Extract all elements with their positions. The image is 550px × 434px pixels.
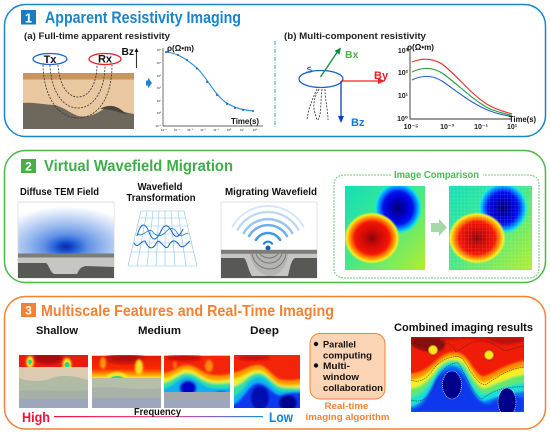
chart: multi-component resistivity curves: 10⁻¹ [474, 124, 489, 131]
diagram: multi-component loop and field arrows: Bx [345, 49, 359, 61]
arrow: to chart [146, 78, 152, 88]
diagram: multi-component loop and field arrows [299, 48, 389, 129]
diagram: Tx Rx ground section: Bz [122, 46, 134, 58]
chart: apparent resistivity curve: 10¹ [240, 128, 244, 132]
imaging panel: shallow [19, 352, 88, 408]
label: Wavefield Transformation [126, 182, 196, 204]
chart: apparent resistivity curve: 10⁻⁴ [174, 128, 181, 132]
chart: apparent resistivity curve: 10¹ [157, 99, 161, 103]
chart: multi-component resistivity curves: Time(s) [509, 114, 536, 124]
image: diffuse TEM field [18, 202, 114, 278]
chart: apparent resistivity curve: 10⁻¹ [213, 128, 219, 132]
heading: Multiscale Features and Real-Time Imaging: Multiscale Features and Real-Time Imaging [41, 303, 334, 320]
section number badge 2 [21, 159, 36, 174]
subheading (b): (b) Multi-component resistivity [284, 31, 427, 42]
chart: multi-component resistivity curves: 10² [398, 70, 409, 77]
imaging panel: medium [92, 353, 161, 408]
panel: virtual wavefield migration [4, 150, 546, 282]
chart: apparent resistivity curve: 10² [157, 86, 161, 90]
chart: multi-component resistivity curves: 10¹ [398, 93, 409, 100]
label: Shallow: Shallow [36, 325, 78, 337]
image: migrating wavefield [221, 202, 317, 278]
chart: apparent resistivity curve: 10⁰ [227, 128, 232, 132]
chart: apparent resistivity curve: 10⁻⁵ [161, 128, 168, 132]
chart: multi-component resistivity curves: 10⁰ [397, 115, 408, 123]
label: Wavefield Transformation: Transformation [126, 193, 196, 204]
chart: apparent resistivity curve: 10⁴ [156, 61, 162, 65]
label: real-time imaging algorithm: Real-time [324, 401, 368, 412]
chart: multi-component resistivity curves: 10⁻⁵ [404, 124, 418, 131]
label: real-time imaging algorithm [306, 401, 390, 423]
chart: multi-component resistivity curves [397, 42, 536, 131]
chart: apparent resistivity curve: Time(s) [231, 116, 259, 126]
label: Migrating Wavefield: Migrating Wavefield [225, 187, 317, 198]
heatmap: combined imaging results [411, 337, 524, 412]
chart: multi-component resistivity curves: ρ(Ω•m) [407, 42, 434, 52]
heatmap: before [344, 182, 425, 270]
diagram: Tx Rx ground section [23, 46, 138, 129]
diagram: Tx Rx ground section: Tx [44, 54, 57, 66]
diagram: wavefield transformation grid [128, 211, 197, 266]
chart: apparent resistivity curve: 10⁻¹ [155, 124, 161, 128]
chart: apparent resistivity curve: 10³ [157, 74, 161, 78]
frequency scale: High to Low: High [22, 410, 50, 425]
diagram: multi-component loop and field arrows: Bz [351, 117, 365, 129]
label: Wavefield Transformation: Wavefield [138, 182, 182, 193]
chart: multi-component resistivity curves: 10¹ [507, 124, 518, 131]
diagram: Tx Rx ground section: Rx [98, 54, 113, 66]
arrow: green comparison [431, 219, 447, 236]
heatmap: after [448, 182, 532, 270]
diagram: multi-component loop and field arrows: By [374, 70, 389, 82]
heading: Apparent Resistivity Imaging: Apparent Resistivity Imaging [45, 9, 241, 27]
callout: parallel computing and multi-window collaboration [310, 334, 385, 399]
imaging panel: low-medium [164, 355, 230, 408]
heading: Virtual Wavefield Migration: Virtual Wavefield Migration [44, 158, 233, 175]
panel: apparent resistivity imaging [4, 4, 546, 136]
section number badge 1 [21, 10, 36, 26]
frequency scale: High to Low: Low [269, 410, 293, 425]
chart: multi-component resistivity curves: 10³ [398, 48, 409, 55]
subheading (a): (a) Full-time apparent resistivity [24, 31, 171, 42]
label: real-time imaging algorithm: imaging algorithm [306, 412, 390, 423]
imaging panel: deep [234, 355, 300, 408]
chart: apparent resistivity curve: 10² [253, 128, 257, 132]
chart: multi-component resistivity curves: 10⁻³ [440, 124, 455, 131]
chart: apparent resistivity curve: 10⁰ [157, 111, 162, 115]
chart: apparent resistivity curve: ρ(Ω•m) [167, 43, 194, 53]
section number badge 3 [21, 303, 36, 318]
chart: apparent resistivity curve: 10⁻³ [187, 128, 193, 132]
callout: parallel computing and multi-window collaboration: Multi- [323, 361, 350, 372]
section number badge 2: 2 [25, 160, 32, 174]
section number badge 3: 3 [25, 304, 32, 318]
callout: parallel computing and multi-window collaboration: collaboration [323, 383, 383, 394]
frequency scale: High to Low [22, 407, 293, 425]
chart: apparent resistivity curve: 10⁵ [157, 48, 162, 52]
label: Medium: Medium [138, 325, 181, 337]
panel: multiscale features and real-time imaging [4, 296, 546, 429]
label: Image Comparison: Image Comparison [394, 170, 479, 181]
chart: apparent resistivity curve [155, 43, 263, 132]
frequency scale: High to Low: Frequency [134, 407, 181, 418]
callout: parallel computing and multi-window collaboration: computing [323, 350, 372, 362]
label: Diffuse TEM Field: Diffuse TEM Field [20, 187, 99, 198]
image comparison group [334, 170, 539, 278]
callout: parallel computing and multi-window collaboration: window [322, 372, 360, 383]
label: Combined imaging results: Combined imaging results [394, 322, 533, 334]
section number badge 1: 1 [25, 10, 32, 26]
chart: apparent resistivity curve: 10⁻² [200, 128, 206, 132]
callout: parallel computing and multi-window collaboration: Parallel [323, 340, 356, 350]
label: Deep: Deep [250, 325, 279, 337]
